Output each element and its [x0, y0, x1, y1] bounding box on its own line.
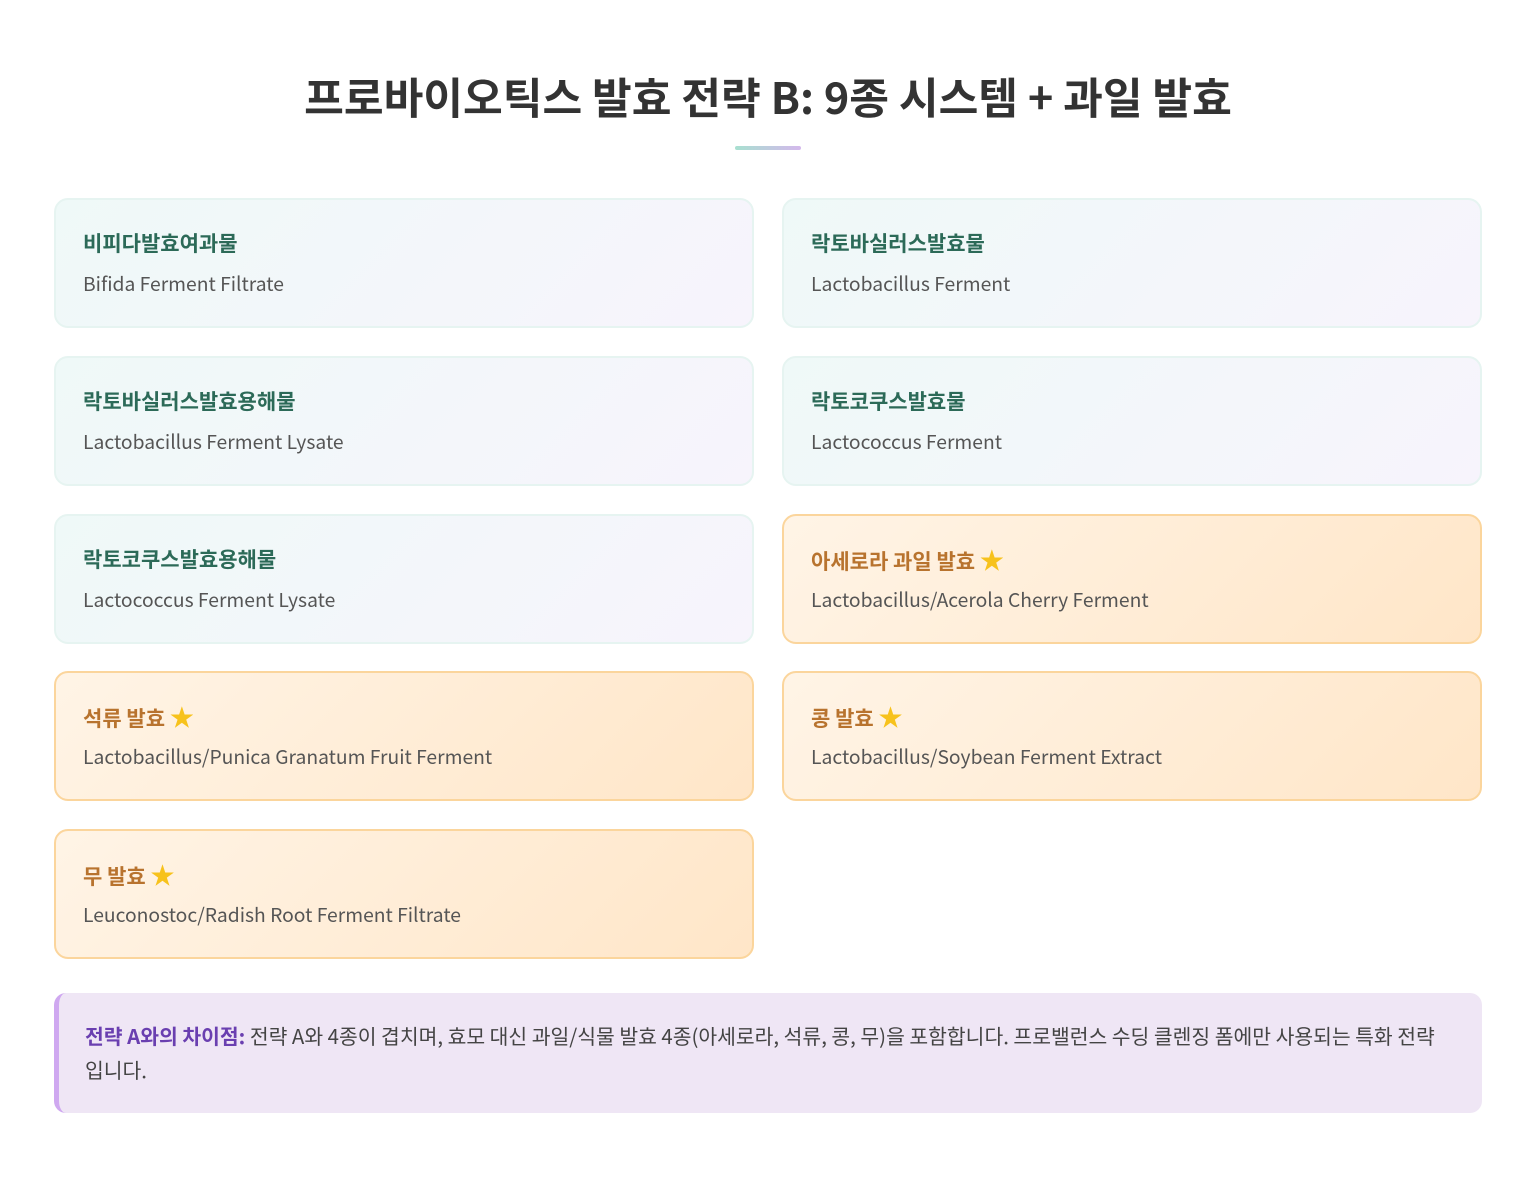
card: lactobacillus lysate [54, 356, 754, 486]
card: radish: 무 발효 ★ [83, 856, 174, 891]
card: lactococcus lysate [54, 514, 754, 644]
card: soybean: Lactobacillus/Soybean Ferment Extract [811, 742, 1162, 770]
card: pomegranate: Lactobacillus/Punica Granatum Fruit Ferment [83, 742, 492, 770]
card: soybean [782, 671, 1482, 801]
card: lactococcus lysate: Lactococcus Ferment Lysate [83, 585, 335, 613]
title: 프로바이오틱스 발효 전략 B: 9종 시스템 + 과일 발효 [304, 65, 1232, 127]
card: acerola [782, 514, 1482, 644]
card: lactococcus: 락토코쿠스발효물 [811, 386, 966, 416]
callout: difference: 입니다. [85, 1054, 147, 1084]
card: lactococcus [782, 356, 1482, 486]
card: lactococcus lysate: 락토코쿠스발효용해물 [83, 544, 276, 574]
card: radish: Leuconostoc/Radish Root Ferment Filtrate [83, 900, 461, 928]
card: bifida: 비피다발효여과물 [83, 228, 238, 258]
card: bifida [54, 198, 754, 328]
callout: difference [54, 993, 1482, 1113]
card: bifida: Bifida Ferment Filtrate [83, 269, 284, 297]
callout: difference: 전략 A와의 차이점: 전략 A와 4종이 겹치며, 효모 대신 과일/식물 발효 4종(아세로라, 석류, 콩, 무)을 포함합니다. 프로밸런스 수딩 클렌징 폼에만 사용되는 특화 전략 [85, 1020, 1435, 1050]
card: pomegranate [54, 671, 754, 801]
card: lactobacillus [782, 198, 1482, 328]
card: lactococcus: Lactococcus Ferment [811, 427, 1002, 455]
card: soybean: 콩 발효 ★ [811, 698, 902, 733]
card: acerola: Lactobacillus/Acerola Cherry Ferment [811, 585, 1149, 613]
card: lactobacillus lysate: Lactobacillus Ferment Lysate [83, 427, 344, 455]
card: lactobacillus: 락토바실러스발효물 [811, 228, 985, 258]
card: radish [54, 829, 754, 959]
card: pomegranate: 석류 발효 ★ [83, 698, 194, 733]
card: lactobacillus lysate: 락토바실러스발효용해물 [83, 386, 296, 416]
card: acerola: 아세로라 과일 발효 ★ [811, 541, 1004, 576]
card: lactobacillus: Lactobacillus Ferment [811, 269, 1010, 297]
